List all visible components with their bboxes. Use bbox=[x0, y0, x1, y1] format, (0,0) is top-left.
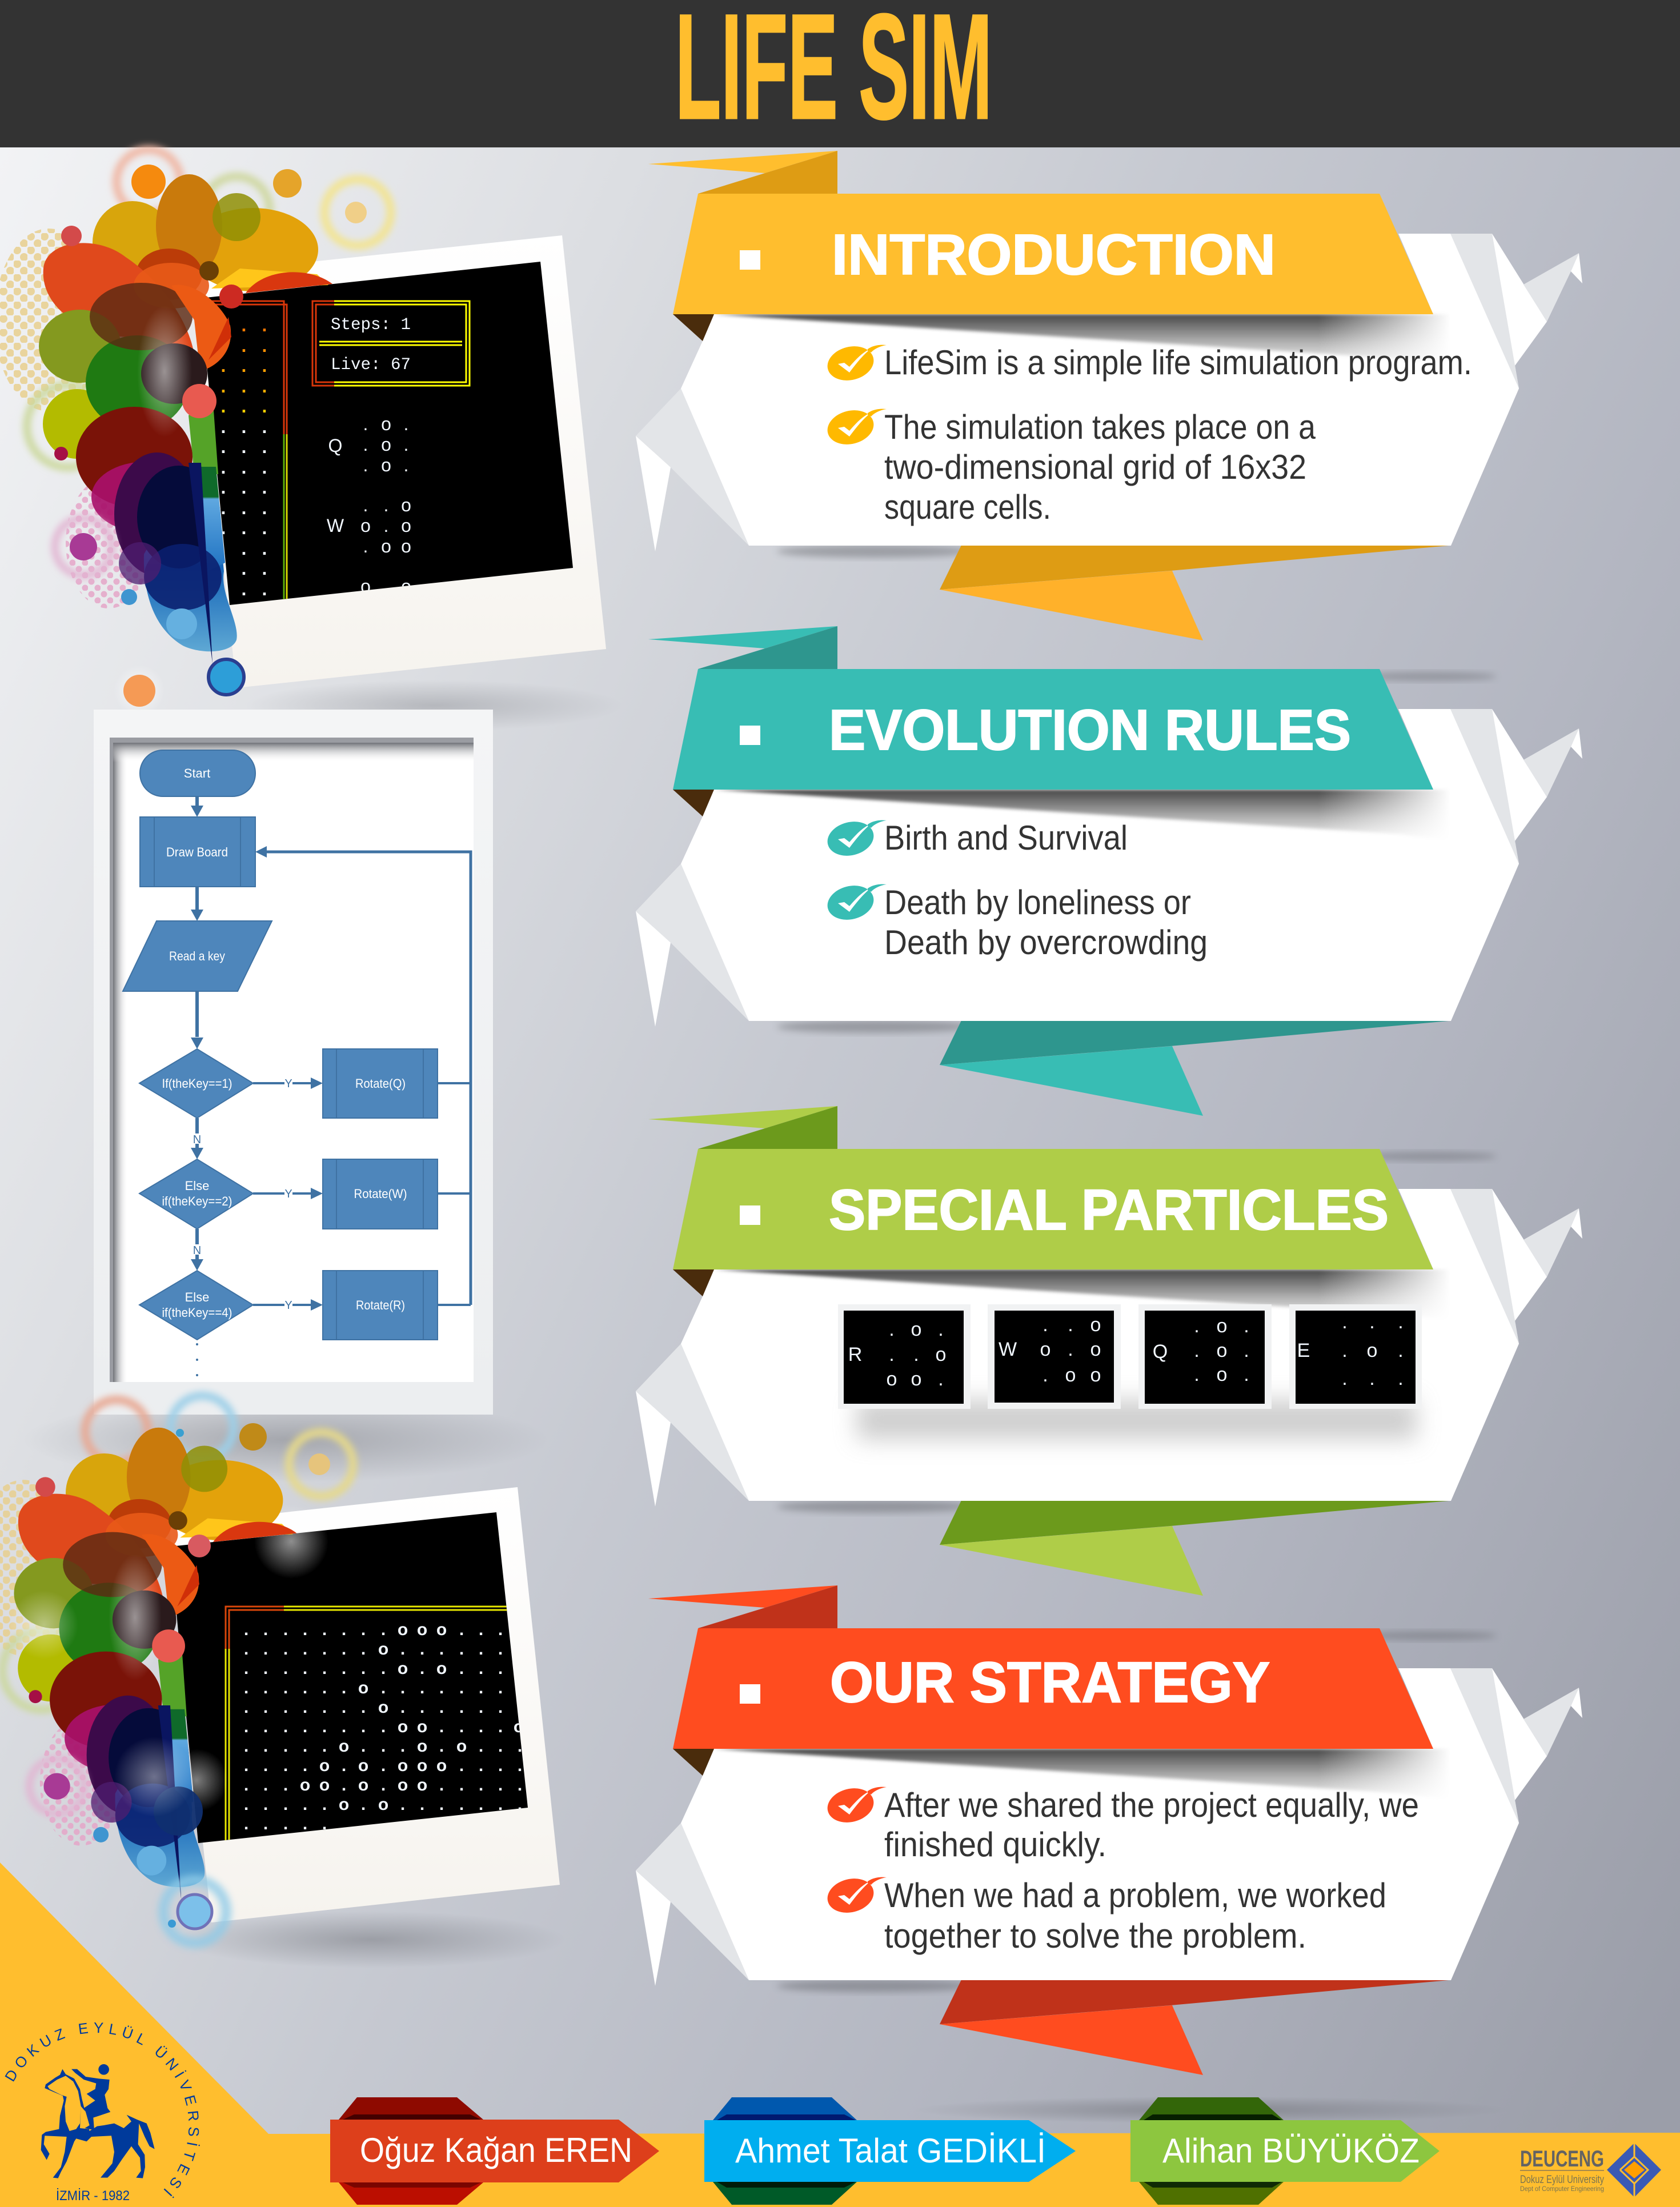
game grid cells: ......o....... bbox=[244, 1679, 503, 1697]
heading band: SPECIAL PARTICLES bbox=[829, 1178, 1389, 1242]
flowchart frame bbox=[94, 710, 493, 1415]
particle card Q: Q bbox=[1153, 1341, 1168, 1363]
game grid cells: .....o.o....... bbox=[244, 1795, 522, 1814]
game grid dots: ... bbox=[221, 376, 267, 396]
bullet: simple program: LifeSim is a simple life simulation program. bbox=[884, 343, 1472, 382]
heading band: INTRODUCTION bbox=[832, 223, 1276, 287]
flowchart labels: Y bbox=[284, 1299, 292, 1312]
game grid cells: ........ooo... bbox=[244, 1620, 503, 1639]
particle card E: .o. bbox=[1342, 1340, 1404, 1361]
white body bbox=[681, 234, 1519, 546]
flower artwork 1 bbox=[0, 174, 332, 664]
top ribbon fold bbox=[648, 1585, 837, 1776]
bullet: grid bbox=[824, 406, 1316, 526]
name tag: Ahmet Talat Gedikli bbox=[704, 2097, 1076, 2205]
seal ring text: DOKUZ EYLÜL ÜNİVERSİTESİ bbox=[5, 2022, 200, 2198]
particle labels in screen: .oo bbox=[363, 536, 411, 556]
game grid dots: ... bbox=[221, 579, 267, 599]
particle card W: .oo bbox=[1043, 1364, 1101, 1386]
department logo: DEUCENG bbox=[1520, 2146, 1604, 2172]
heading band bbox=[673, 669, 1433, 790]
panel: special particles bbox=[636, 1106, 1582, 1596]
particle card W: ..o bbox=[1043, 1314, 1101, 1336]
flowchart labels: Rotate(W) bbox=[354, 1187, 407, 1201]
header bar bbox=[0, 0, 1680, 150]
bullet: grid: square cells. bbox=[884, 488, 1051, 526]
game grid cells: .......o...... bbox=[244, 1640, 503, 1659]
particle labels in screen: W bbox=[327, 515, 344, 536]
flowchart labels: Draw Board bbox=[166, 845, 228, 859]
bullet: grid: The simulation takes place on a bbox=[884, 408, 1316, 446]
game grid cells bbox=[244, 1620, 524, 1833]
particle card E: ... bbox=[1342, 1311, 1404, 1333]
name tag: Oguz Kagan Eren: Oğuz Kağan EREN bbox=[360, 2131, 632, 2169]
bullet: shared equally: finished quickly. bbox=[884, 1825, 1106, 1864]
flowchart labels: N bbox=[193, 1244, 201, 1257]
name tag: Alihan Buyukoz: Alihan BÜYÜKÖZ bbox=[1162, 2132, 1420, 2170]
flowchart labels: Rotate(R) bbox=[356, 1298, 405, 1312]
bullet: death: Death by overcrowding bbox=[884, 923, 1208, 962]
bottom ribbon fold bbox=[940, 543, 1449, 640]
panel: our strategy bbox=[636, 1585, 1582, 2075]
flowchart connectors bbox=[191, 796, 471, 1311]
flowchart labels: if(theKey==4) bbox=[162, 1305, 232, 1320]
game grid cells: ..... bbox=[244, 1815, 327, 1833]
paper wings bbox=[636, 1631, 1582, 1992]
heading band: EVOLUTION RULES bbox=[829, 698, 1351, 762]
footer yellow band bbox=[0, 1862, 1680, 2207]
top ribbon fold bbox=[648, 151, 837, 341]
game grid cells: ...oo.o.oo..... bbox=[244, 1776, 522, 1795]
particle card Q: .o. bbox=[1194, 1340, 1249, 1361]
particle card E: ... bbox=[1342, 1368, 1404, 1389]
game grid dots: ... bbox=[221, 518, 267, 538]
game grid cells: .....o...o.o... bbox=[244, 1737, 522, 1756]
heading band bbox=[673, 1149, 1433, 1269]
icon: diamond mark bbox=[1607, 2143, 1661, 2197]
heading band: OUR STRATEGY bbox=[830, 1651, 1270, 1715]
game grid dots: ... bbox=[221, 436, 267, 457]
orbs in front of flower 1 bbox=[209, 285, 244, 695]
halo rings behind flower 1 bbox=[114, 150, 391, 716]
bullet: death: Death by loneliness or bbox=[884, 883, 1191, 922]
particle labels in screen: o.o bbox=[360, 515, 411, 536]
particle card R: ..o bbox=[889, 1344, 946, 1365]
particle labels in screen bbox=[327, 414, 411, 596]
bottom ribbon fold bbox=[940, 1977, 1449, 2075]
name tag: Alihan Buyukoz bbox=[1130, 2097, 1440, 2205]
soft shadows under left images bbox=[23, 680, 1508, 2124]
particle labels in screen: oo bbox=[360, 576, 411, 596]
bullet: death bbox=[824, 881, 1208, 962]
particle labels in screen: .o. bbox=[363, 434, 408, 455]
paper wings bbox=[636, 234, 1582, 558]
particle card Q: .o. bbox=[1194, 1364, 1249, 1385]
game grid dots bbox=[222, 329, 266, 595]
white body bbox=[681, 1668, 1519, 1980]
icon: horse and rider bbox=[41, 2064, 155, 2178]
particle card Q bbox=[1138, 1304, 1272, 1409]
top ribbon fold bbox=[648, 1106, 837, 1296]
flowchart labels bbox=[162, 766, 407, 1376]
particle card R: R bbox=[848, 1344, 862, 1365]
game grid dots: ... bbox=[221, 335, 267, 356]
paper wings bbox=[636, 1152, 1582, 1513]
department logo bbox=[1520, 2143, 1661, 2197]
heading band bbox=[673, 1628, 1433, 1749]
stats box: Live: 67 bbox=[331, 355, 411, 375]
game grid dots: ... bbox=[221, 396, 267, 416]
department logo: Dokuz Eylül University bbox=[1520, 2174, 1604, 2186]
flowchart labels: Rotate(Q) bbox=[355, 1076, 406, 1091]
particle card W bbox=[988, 1304, 1121, 1409]
flowchart labels: Else bbox=[185, 1290, 209, 1304]
particle labels in screen: .o. bbox=[363, 455, 408, 475]
particle card E: E bbox=[1297, 1340, 1310, 1361]
polaroid screenshot: steps and live bbox=[193, 235, 606, 688]
game grid dots: .. bbox=[242, 315, 267, 335]
name tag: Ahmet Talat Gedikli: Ahmet Talat GEDİKLİ bbox=[735, 2132, 1046, 2170]
white body bbox=[681, 709, 1519, 1021]
particle card W: o.o bbox=[1040, 1339, 1101, 1360]
game grid dots: ... bbox=[221, 477, 267, 498]
university seal bbox=[5, 2022, 200, 2204]
bottom ribbon fold bbox=[940, 1498, 1449, 1596]
particle card R: .o. bbox=[889, 1319, 944, 1340]
bullet: birth and survival bbox=[824, 817, 1128, 860]
bottom ribbon fold bbox=[940, 1018, 1449, 1116]
bullet: worked together: When we had a problem, we worked bbox=[884, 1876, 1386, 1914]
bullet: shared equally bbox=[824, 1784, 1419, 1864]
flowchart labels: N bbox=[193, 1133, 201, 1146]
bullet: birth and survival: Birth and Survival bbox=[884, 819, 1128, 857]
orbs in front of flower 2 bbox=[10, 1535, 226, 1943]
game grid cells: .......o...... bbox=[244, 1698, 503, 1717]
flowchart labels: If(theKey==1) bbox=[162, 1076, 232, 1091]
heading band bbox=[673, 194, 1433, 314]
game grid dots: ... bbox=[221, 558, 267, 579]
game grid dots: ... bbox=[221, 457, 267, 478]
flowchart labels: Start bbox=[184, 766, 210, 780]
stats box: Steps: 1 bbox=[331, 315, 411, 335]
particle labels in screen: Q bbox=[328, 435, 342, 456]
particle card E bbox=[1289, 1304, 1422, 1409]
flowchart labels: if(theKey==2) bbox=[162, 1194, 232, 1208]
paper wings bbox=[636, 672, 1582, 1033]
game grid dots: ... bbox=[221, 355, 267, 376]
bullet: worked together: together to solve the problem. bbox=[884, 1917, 1306, 1955]
panel: evolution rules bbox=[636, 626, 1582, 1116]
particle labels in screen: .o. bbox=[363, 414, 408, 434]
particle card R bbox=[838, 1304, 971, 1409]
flowchart nodes bbox=[123, 750, 438, 1340]
game grid dots: ... bbox=[221, 416, 267, 437]
panel: introduction bbox=[636, 151, 1582, 640]
polaroid screenshot: evolving grid bbox=[165, 1487, 560, 1922]
game grid cells: ........oo....o bbox=[244, 1717, 524, 1736]
name tag: Oguz Kagan Eren bbox=[330, 2097, 659, 2205]
seal founding line: İZMİR - 1982 bbox=[56, 2188, 130, 2204]
department logo: Dept of Computer Engineering bbox=[1520, 2185, 1604, 2193]
bullet: worked together bbox=[824, 1874, 1386, 1955]
halo rings behind flower 2 bbox=[85, 1396, 353, 1496]
particle card R: oo. bbox=[887, 1368, 944, 1390]
white body bbox=[681, 1189, 1519, 1501]
particle labels in screen: ..o bbox=[363, 495, 411, 515]
game grid cells: ....o.o.ooo.... bbox=[244, 1756, 522, 1775]
flowchart labels: Y bbox=[284, 1078, 292, 1090]
flower artwork 2 bbox=[0, 1428, 296, 1899]
top ribbon fold bbox=[648, 626, 837, 816]
bullet: grid: two-dimensional grid of 16x32 bbox=[884, 448, 1306, 486]
flowchart labels: Read a key bbox=[169, 949, 225, 963]
game grid dots: ... bbox=[221, 498, 267, 518]
flowchart labels: Else bbox=[185, 1179, 209, 1193]
particle card W: W bbox=[999, 1339, 1017, 1360]
flowchart labels: Y bbox=[284, 1188, 292, 1200]
particle card Q: .o. bbox=[1194, 1315, 1249, 1337]
game grid cells: ........o.o... bbox=[244, 1659, 503, 1678]
game grid dots: ... bbox=[221, 538, 267, 559]
bullet: shared equally: After we shared the project equally, we bbox=[884, 1786, 1419, 1824]
cards shadow bbox=[857, 1400, 1417, 1440]
stats box bbox=[312, 301, 470, 386]
